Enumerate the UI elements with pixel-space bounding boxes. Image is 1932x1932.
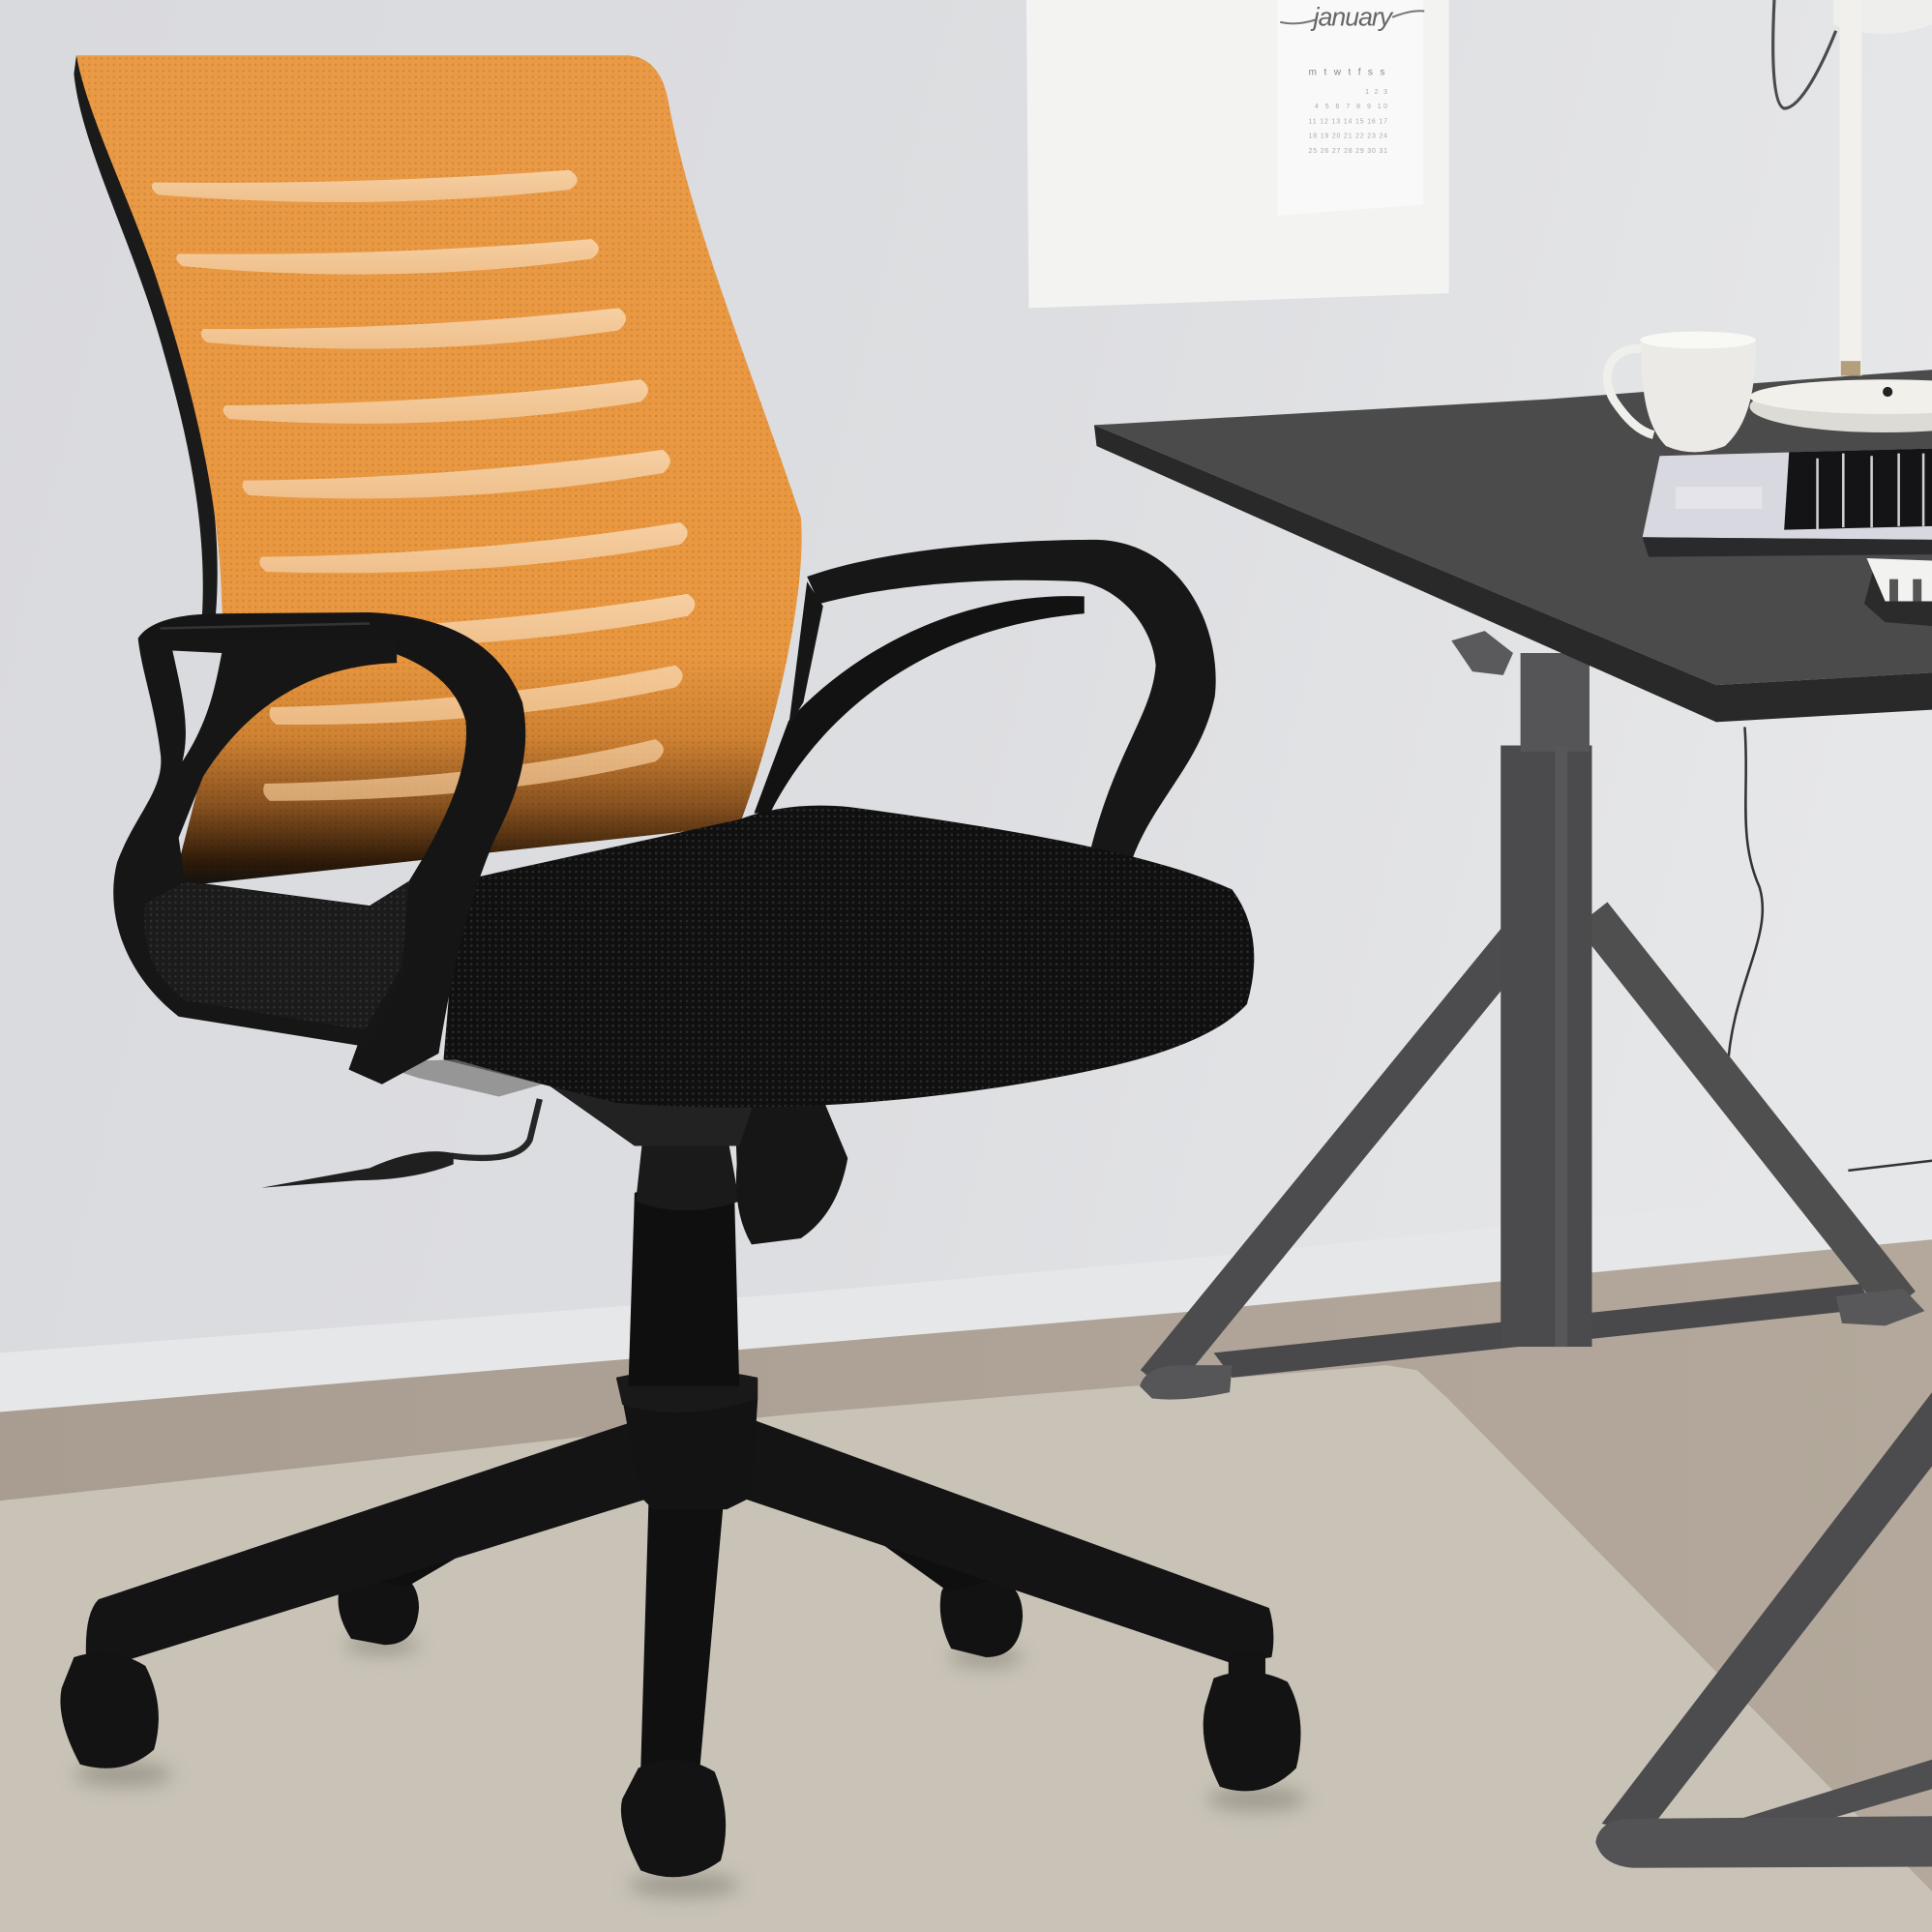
back right leg	[1591, 914, 1900, 1303]
cross bar	[1213, 1284, 1873, 1378]
wood floor	[0, 1239, 1932, 1932]
desk top	[1094, 370, 1932, 722]
arm highlight	[161, 623, 370, 629]
floor mat	[0, 1365, 1932, 1932]
office chair	[60, 55, 1301, 1877]
caster stems	[104, 1651, 1247, 1688]
gas cylinder collar	[616, 1370, 758, 1412]
front centre base leg	[640, 1436, 729, 1774]
calendar flourish	[1280, 11, 1424, 23]
baseboard	[0, 1183, 1932, 1412]
backrest slots	[152, 170, 695, 801]
seat cushion	[370, 806, 1254, 1108]
mesh backrest	[76, 55, 802, 887]
column highlight	[1555, 746, 1567, 1347]
calendar dates: 1 2 3	[1365, 89, 1387, 96]
calendar card	[1278, 0, 1424, 216]
casters shadows	[74, 1635, 1306, 1897]
foot pad right	[1836, 1289, 1924, 1325]
calendar month: january	[1311, 3, 1394, 32]
calendar dates: 18 19 20 21 22 23 24	[1309, 134, 1387, 140]
calendar dates: 11 12 13 14 15 16 17	[1309, 118, 1387, 125]
seat side	[144, 882, 409, 1030]
keyboard	[1784, 449, 1932, 530]
desk bracket	[1451, 631, 1513, 675]
upper column	[1521, 653, 1590, 752]
calendar dates: 25 26 27 28 29 30 31	[1309, 148, 1387, 155]
backrest edge	[74, 55, 218, 616]
tilt knob	[734, 1090, 847, 1244]
front casters	[60, 1652, 1301, 1877]
foot pad left	[1140, 1365, 1233, 1400]
lamp	[1750, 0, 1932, 432]
cylinder cover	[636, 1134, 739, 1210]
back left leg	[1156, 938, 1518, 1382]
height lever	[261, 1099, 540, 1188]
far armrest	[754, 540, 1216, 863]
rear base legs	[351, 1436, 666, 1587]
gas cylinder	[629, 1185, 739, 1386]
calendar dates	[1309, 89, 1387, 155]
seat mechanism	[530, 1072, 764, 1145]
near armrest	[113, 612, 525, 1085]
front right base leg	[739, 1417, 1273, 1663]
notebook stack	[1864, 558, 1932, 626]
laptop	[1643, 449, 1932, 557]
lower column	[1501, 746, 1591, 1347]
fabric underside	[370, 1059, 542, 1097]
wall poster	[1026, 0, 1449, 308]
cables	[1728, 727, 1932, 1171]
calendar dates: 4 5 6 7 8 9 10	[1315, 104, 1387, 110]
front left base leg	[86, 1417, 653, 1663]
lamp cord	[1773, 0, 1836, 108]
coffee cup	[1607, 332, 1756, 452]
desk legs	[1140, 631, 1924, 1400]
rear casters	[339, 1567, 1023, 1657]
near arm frame	[113, 639, 409, 1048]
foreground desk leg	[1595, 1392, 1932, 1868]
base hub	[622, 1399, 758, 1509]
calendar weekdays: m t w t f s s	[1309, 68, 1385, 78]
